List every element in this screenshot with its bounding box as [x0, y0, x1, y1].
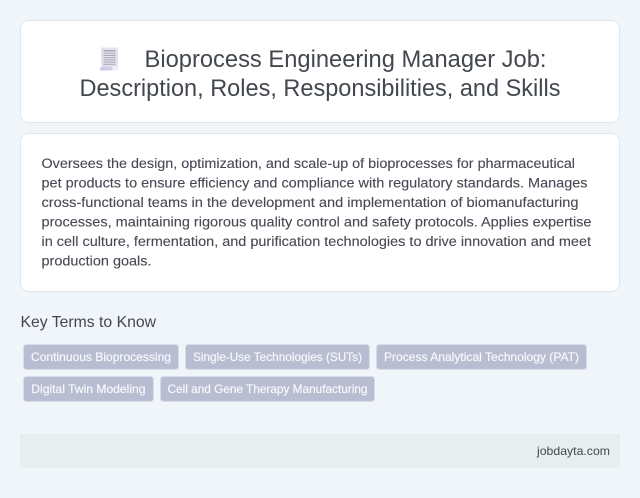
description text: cross-functional teams in the development and implementation of biomanufacturing: [42, 195, 578, 211]
icon: document scroll: [100, 48, 118, 71]
description text: production goals.: [42, 254, 152, 270]
chip: Digital Twin Modeling: Digital Twin Modeling: [31, 382, 145, 396]
footer text: jobdayta.com: [536, 444, 610, 458]
chip: Continuous Bioprocessing: [24, 344, 178, 370]
description text: Oversees the design, optimization, and scale-up of bioprocesses for pharmaceutical: [42, 156, 575, 172]
title: Bioprocess Engineering Manager Job:: [144, 46, 546, 73]
panel: title card: [20, 20, 620, 122]
panel: job description card: [20, 134, 620, 292]
chip: Cell and Gene Therapy Manufacturing: Cell and Gene Therapy Manufacturing: [168, 382, 368, 396]
description text: pet products to ensure efficiency and compliance with regulatory standards. Manages: [42, 176, 588, 192]
chip: Single-Use Technologies: Single-Use Technologies (SUTs): [193, 350, 362, 364]
description text: [42, 156, 592, 270]
description text: in cell culture, fermentation, and purification technologies to drive innovation and meet: [42, 234, 591, 250]
title: [80, 46, 560, 102]
chip: Digital Twin Modeling: [24, 376, 154, 402]
heading: key terms: Key Terms to Know: [20, 314, 156, 331]
chip: Process Analytical Technology: Process Analytical Technology (PAT): [384, 350, 579, 364]
description text: processes, maintaining rigorous quality control and safety protocols. Applies expertise: [42, 214, 592, 230]
chip: Single-Use Technologies: [186, 344, 370, 370]
title: Description, Roles, Responsibilities, and Skills: [80, 75, 560, 102]
chip: Continuous Bioprocessing: Continuous Bioprocessing: [31, 350, 171, 364]
chip: Process Analytical Technology: [376, 344, 586, 370]
footer bar: [20, 434, 620, 468]
chip: Cell and Gene Therapy Manufacturing: [160, 376, 374, 402]
